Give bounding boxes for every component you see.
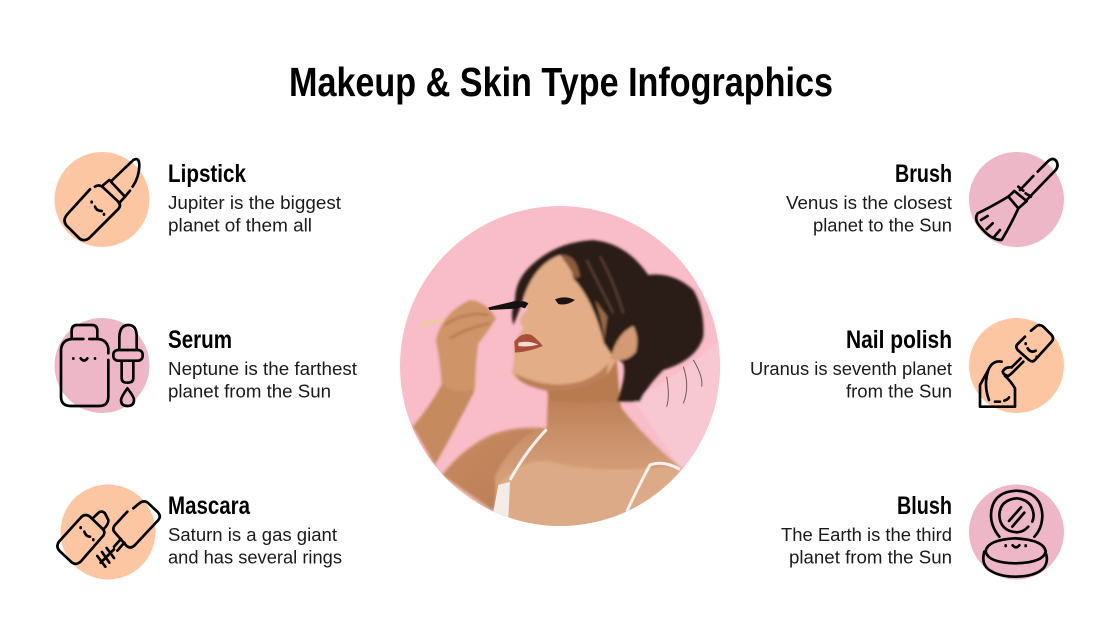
camisole straps [510, 429, 680, 512]
item: nail polish [750, 318, 1064, 413]
item: serum [54, 318, 357, 413]
lips [514, 334, 543, 353]
face [510, 254, 618, 386]
chest and neck [442, 387, 682, 537]
heading: serum: Serum [168, 326, 232, 354]
ear [611, 326, 637, 360]
heading: lipstick: Lipstick [168, 160, 246, 188]
text: brush: Venus is the closest [786, 193, 952, 213]
heading: brush: Brush [895, 160, 952, 188]
text: brush: planet to the Sun [813, 216, 952, 236]
text: nail polish: from the Sun [846, 382, 952, 402]
text: blush: planet from the Sun [789, 548, 952, 568]
text: mascara: and has several rings [168, 548, 342, 568]
icon: lipstick [54, 152, 150, 247]
icon: blush compact [969, 484, 1064, 580]
icon: brush [969, 152, 1064, 247]
hand [436, 300, 496, 392]
hair and bun [512, 240, 704, 402]
heading: nail polish: Nail polish [846, 326, 952, 354]
makeup brush [420, 320, 443, 325]
title: Makeup & Skin Type Infographics [289, 59, 833, 105]
icon: serum [54, 318, 150, 413]
icon: mascara [57, 484, 160, 580]
heading: blush: Blush [897, 492, 952, 520]
central photo: woman applying makeup [400, 200, 720, 537]
icon: nail polish [969, 318, 1064, 413]
forearm [413, 382, 475, 465]
text: lipstick: Jupiter is the biggest [168, 193, 341, 213]
heading: mascara: Mascara [168, 492, 251, 520]
text: serum: Neptune is the farthest [168, 359, 357, 379]
text: serum: planet from the Sun [168, 382, 331, 402]
text: nail polish: Uranus is seventh planet [750, 359, 952, 379]
item: mascara [57, 484, 342, 580]
text: mascara: Saturn is a gas giant [168, 525, 337, 545]
eyes [555, 297, 575, 304]
item: lipstick [54, 152, 341, 247]
item: brush [786, 152, 1064, 247]
text: lipstick: planet of them all [168, 216, 312, 236]
text: blush: The Earth is the third [781, 525, 952, 545]
item: blush [781, 484, 1064, 580]
